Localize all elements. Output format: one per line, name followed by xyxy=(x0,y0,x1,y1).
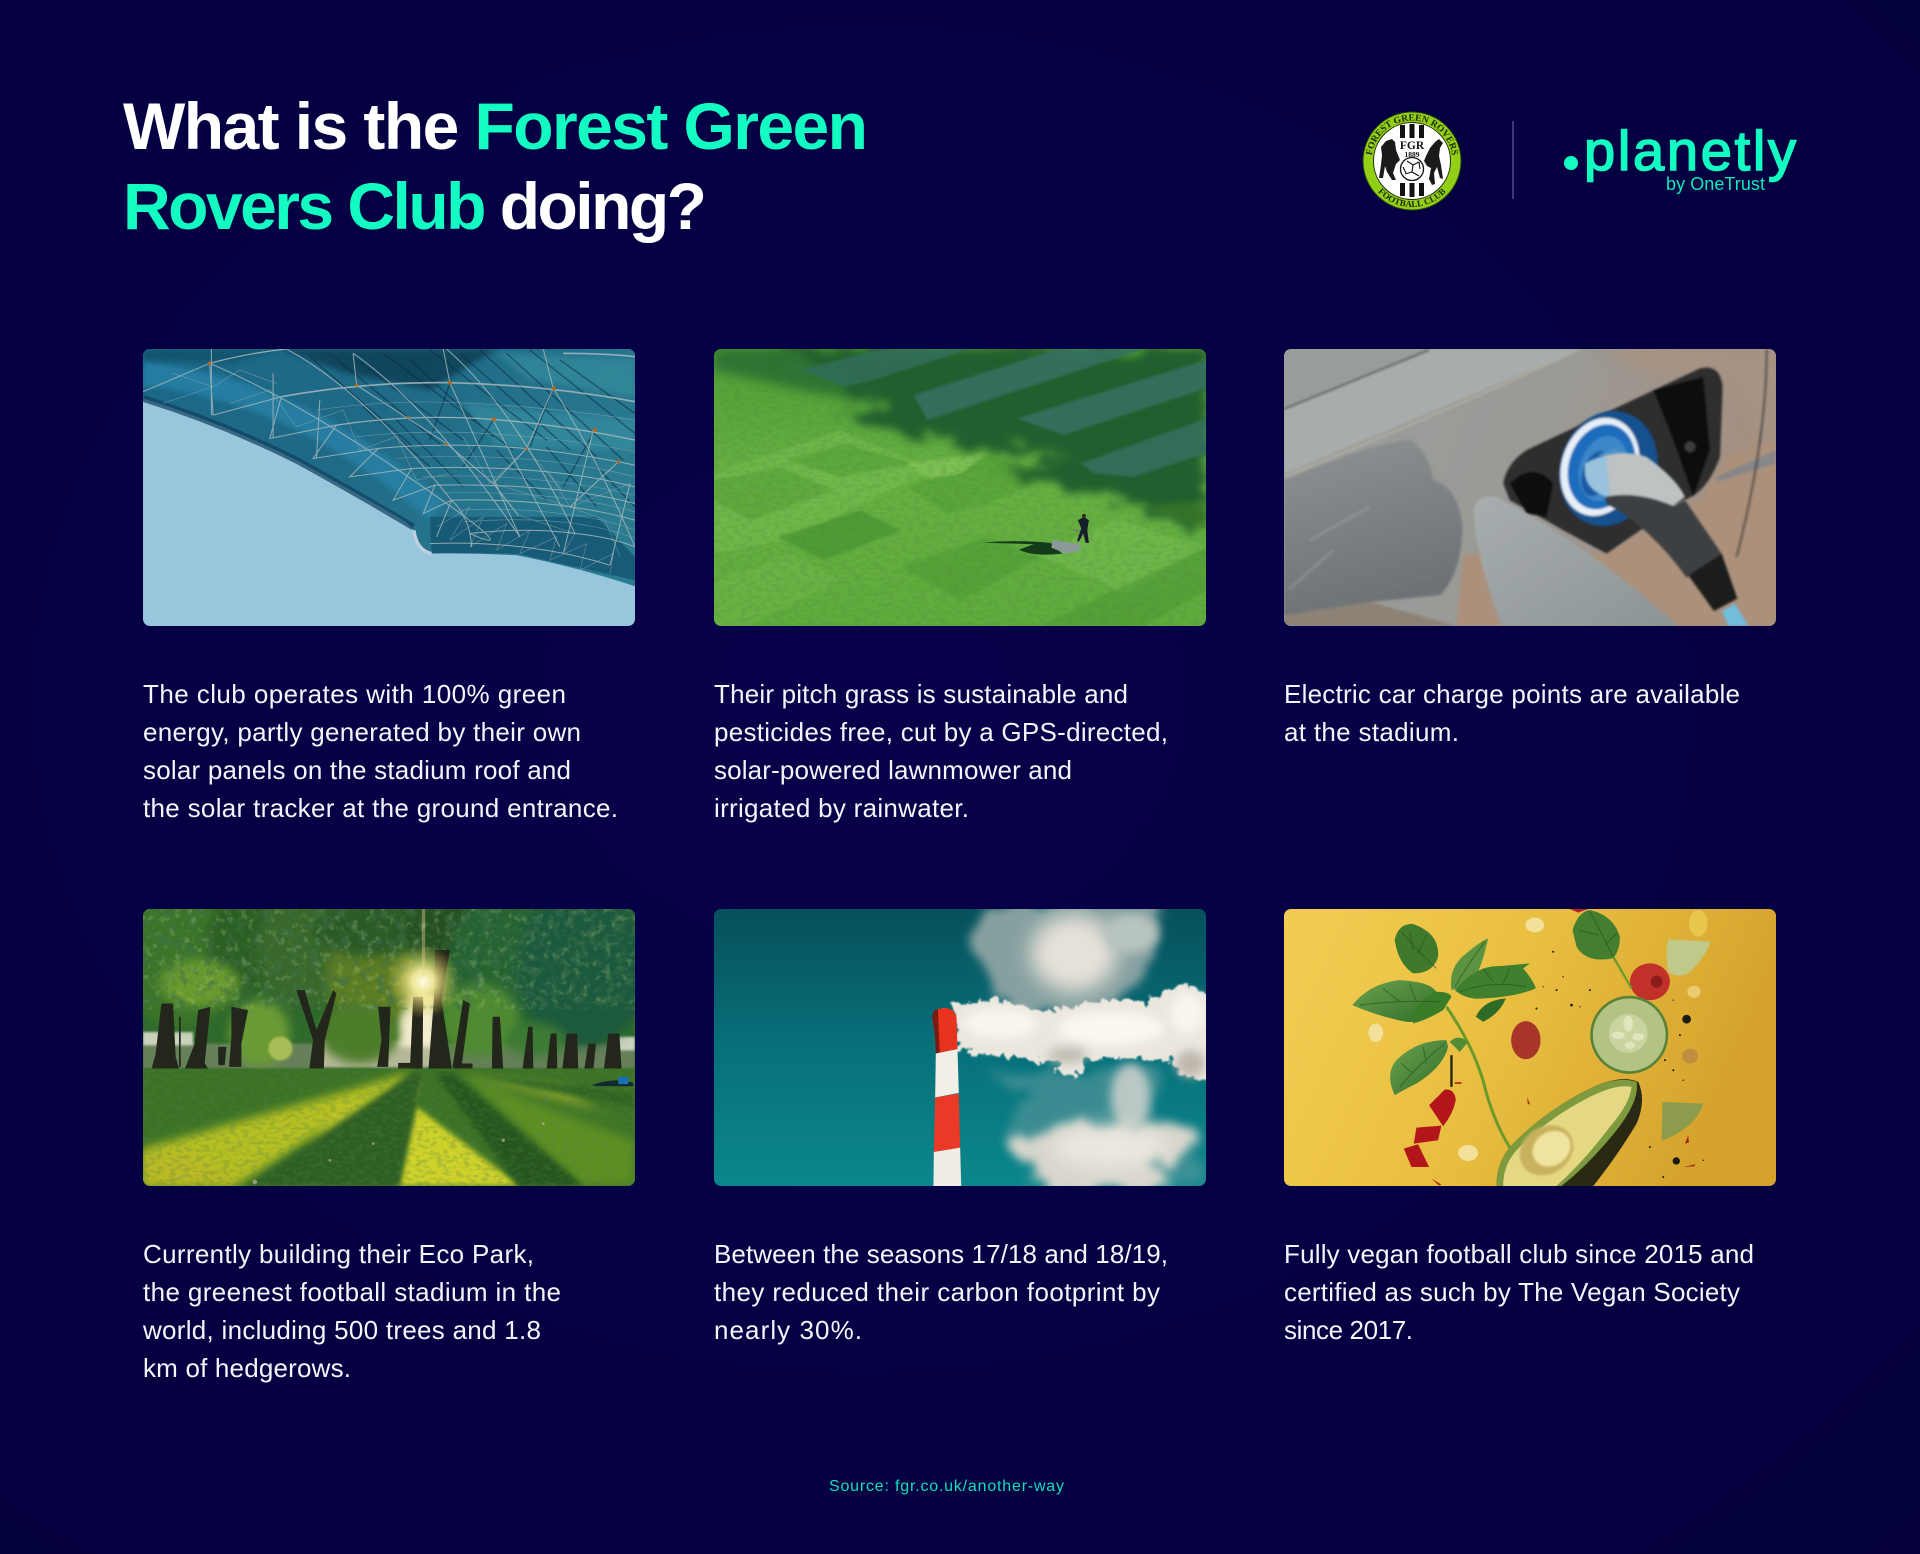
tree canopy xyxy=(116,887,650,1067)
text: vegan club: certified as such by The Vegan Society xyxy=(1284,1277,1740,1307)
basil leaf upper right xyxy=(1573,910,1632,988)
main white smoke plume xyxy=(954,985,1221,1084)
text: carbon footprint: Between the seasons 17/18 and 18/19, xyxy=(714,1239,1168,1269)
text: pitch grass: irrigated by rainwater. xyxy=(714,793,969,823)
text: green energy: solar panels on the stadium roof and xyxy=(143,755,571,785)
text: Eco Park: Currently building their Eco Park, xyxy=(143,1239,534,1269)
grass with sun streaks xyxy=(143,1069,635,1186)
text: green energy xyxy=(143,679,618,823)
divider between logos xyxy=(1512,121,1514,199)
text: charge points xyxy=(1284,679,1740,747)
source note: Source: fgr.co.uk/another-way xyxy=(829,1478,1064,1495)
avocado chunk xyxy=(1662,1102,1703,1141)
text: carbon footprint: nearly 30%. xyxy=(714,1315,862,1345)
tree trunks xyxy=(150,950,622,1074)
red and white chimney xyxy=(932,1008,961,1186)
text: vegan club: since 2017. xyxy=(1284,1315,1413,1345)
mown pitch stripes xyxy=(714,430,1206,626)
chilli pieces xyxy=(1404,1089,1456,1167)
text: vegan club xyxy=(1284,1239,1754,1345)
text: carbon footprint xyxy=(714,1239,1168,1345)
cucumber slice xyxy=(1590,996,1668,1074)
charge flap xyxy=(1473,496,1678,626)
text: green energy: The club operates with 100% green xyxy=(143,679,566,709)
text: pitch grass xyxy=(714,679,1168,823)
text: charge points: at the stadium. xyxy=(1284,717,1459,747)
text: Eco Park xyxy=(142,1239,561,1383)
text: Eco Park: world, including 500 trees and 1.8 xyxy=(142,1315,541,1345)
text: Eco Park: the greenest football stadium in the xyxy=(143,1277,561,1307)
logo: Forest Green Rovers crest xyxy=(1362,112,1462,210)
panel: chimney smoke photo xyxy=(714,909,1206,1186)
corn kernels and pepper specks xyxy=(1368,910,1708,1185)
lower cloud xyxy=(977,1057,1206,1194)
roof structure xyxy=(143,349,635,586)
basil plant xyxy=(1352,924,1536,1150)
logo: planetly by OneTrust: planetly xyxy=(1584,119,1796,182)
panel: electric car charging photo xyxy=(1284,349,1776,626)
logo: Forest Green Rovers crest: FGR xyxy=(1400,140,1425,152)
title xyxy=(123,89,868,243)
tree shadow with stripes xyxy=(714,349,1206,530)
foliage texture xyxy=(143,909,635,1009)
text: pitch grass: pesticides free, cut by a GPS-directed, xyxy=(714,717,1168,747)
text: pitch grass: solar-powered lawnmower and xyxy=(714,755,1072,785)
turf texture xyxy=(714,349,1206,626)
text: charge points: Electric car charge points are available xyxy=(1284,679,1740,709)
tomato slices xyxy=(1511,909,1670,1059)
blue charging socket xyxy=(1544,398,1672,539)
logo: planetly by OneTrust: by OneTrust xyxy=(1666,174,1765,194)
sun glow xyxy=(386,945,460,1018)
car bodywork xyxy=(1284,349,1776,626)
logo: Forest Green Rovers crest: FOREST GREEN ROVERS xyxy=(1366,114,1458,156)
cucumber chunk xyxy=(1667,939,1711,976)
horizon and sky gaps xyxy=(143,993,635,1069)
panel: sunlit park photo xyxy=(143,909,635,1186)
text: Eco Park: km of hedgerows. xyxy=(143,1353,351,1383)
text: green energy: energy, partly generated by their own xyxy=(143,717,581,747)
title: What is the Forest Green xyxy=(123,89,868,163)
charging plug and cable xyxy=(1585,453,1748,626)
avocado half xyxy=(1496,1079,1642,1186)
panel: stadium roof photo xyxy=(143,349,635,626)
logo: Forest Green Rovers crest: FOOTBALL CLUB xyxy=(1378,188,1446,208)
text: vegan club: Fully vegan football club since 2015 and xyxy=(1284,1239,1754,1269)
logo: Forest Green Rovers crest: 1889 xyxy=(1404,150,1420,159)
title: Rovers Club doing? xyxy=(123,169,707,243)
sun flare ray xyxy=(422,909,425,976)
upper cloud xyxy=(964,903,1167,1017)
text: green energy: the solar tracker at the ground entrance. xyxy=(143,793,618,823)
text: carbon footprint: they reduced their carbon footprint by xyxy=(714,1277,1160,1307)
groundskeeper with mower xyxy=(982,514,1089,555)
text: pitch grass: Their pitch grass is sustainable and xyxy=(714,679,1128,709)
charging port recess xyxy=(1503,367,1723,554)
panel: pitch grass photo xyxy=(714,349,1206,1066)
panel: vegan food photo xyxy=(1284,909,1776,1186)
